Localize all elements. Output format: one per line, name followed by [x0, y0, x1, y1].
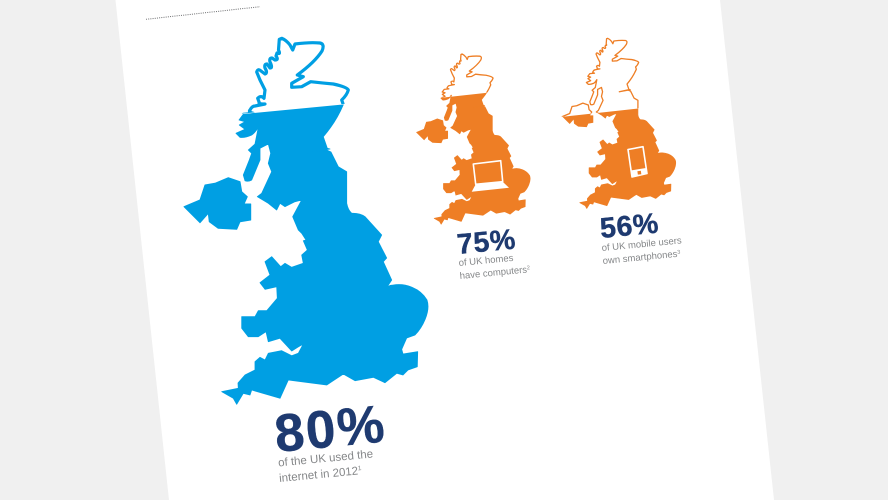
icon: laptop: [472, 161, 509, 192]
statistic: 75%: 75%: [456, 223, 517, 261]
statistic: 56%: 56%: [599, 207, 660, 245]
caption: of UK homes have computers: have computers: [459, 265, 528, 282]
caption: of UK mobile users own smartphones: of UK mobile users: [601, 235, 682, 254]
caption: of UK homes have computers: 2: [527, 265, 530, 272]
map: UK 75 percent filled orange: [417, 54, 530, 224]
map: UK 80 percent filled blue: [184, 38, 428, 404]
infographic canvas: [116, 0, 774, 500]
icon: smartphone: [628, 147, 647, 177]
map: UK 56 percent filled orange: [562, 38, 676, 208]
caption: of UK homes have computers: [458, 253, 531, 282]
white tilted page: [116, 0, 774, 500]
panel: 80% internet use: [184, 38, 428, 485]
caption: of UK mobile users own smartphones: [601, 235, 682, 267]
panel: 56% smartphones: [562, 38, 682, 267]
caption: of the UK used the internet in 2012: 1: [358, 465, 362, 472]
caption: of UK homes have computers: of UK homes: [458, 253, 514, 269]
dotted rule: [146, 7, 260, 19]
caption: of the UK used the internet in 2012: [278, 448, 374, 485]
caption: of the UK used the internet in 2012: of the UK used the: [278, 448, 374, 469]
caption: of UK mobile users own smartphones: own smartphones: [602, 249, 678, 267]
statistic: 80%: 80%: [272, 395, 389, 464]
caption: of UK mobile users own smartphones: 3: [677, 250, 681, 256]
caption: of the UK used the internet in 2012: internet in 2012: [279, 465, 359, 485]
panel: 75% homes with computers: [417, 54, 531, 282]
